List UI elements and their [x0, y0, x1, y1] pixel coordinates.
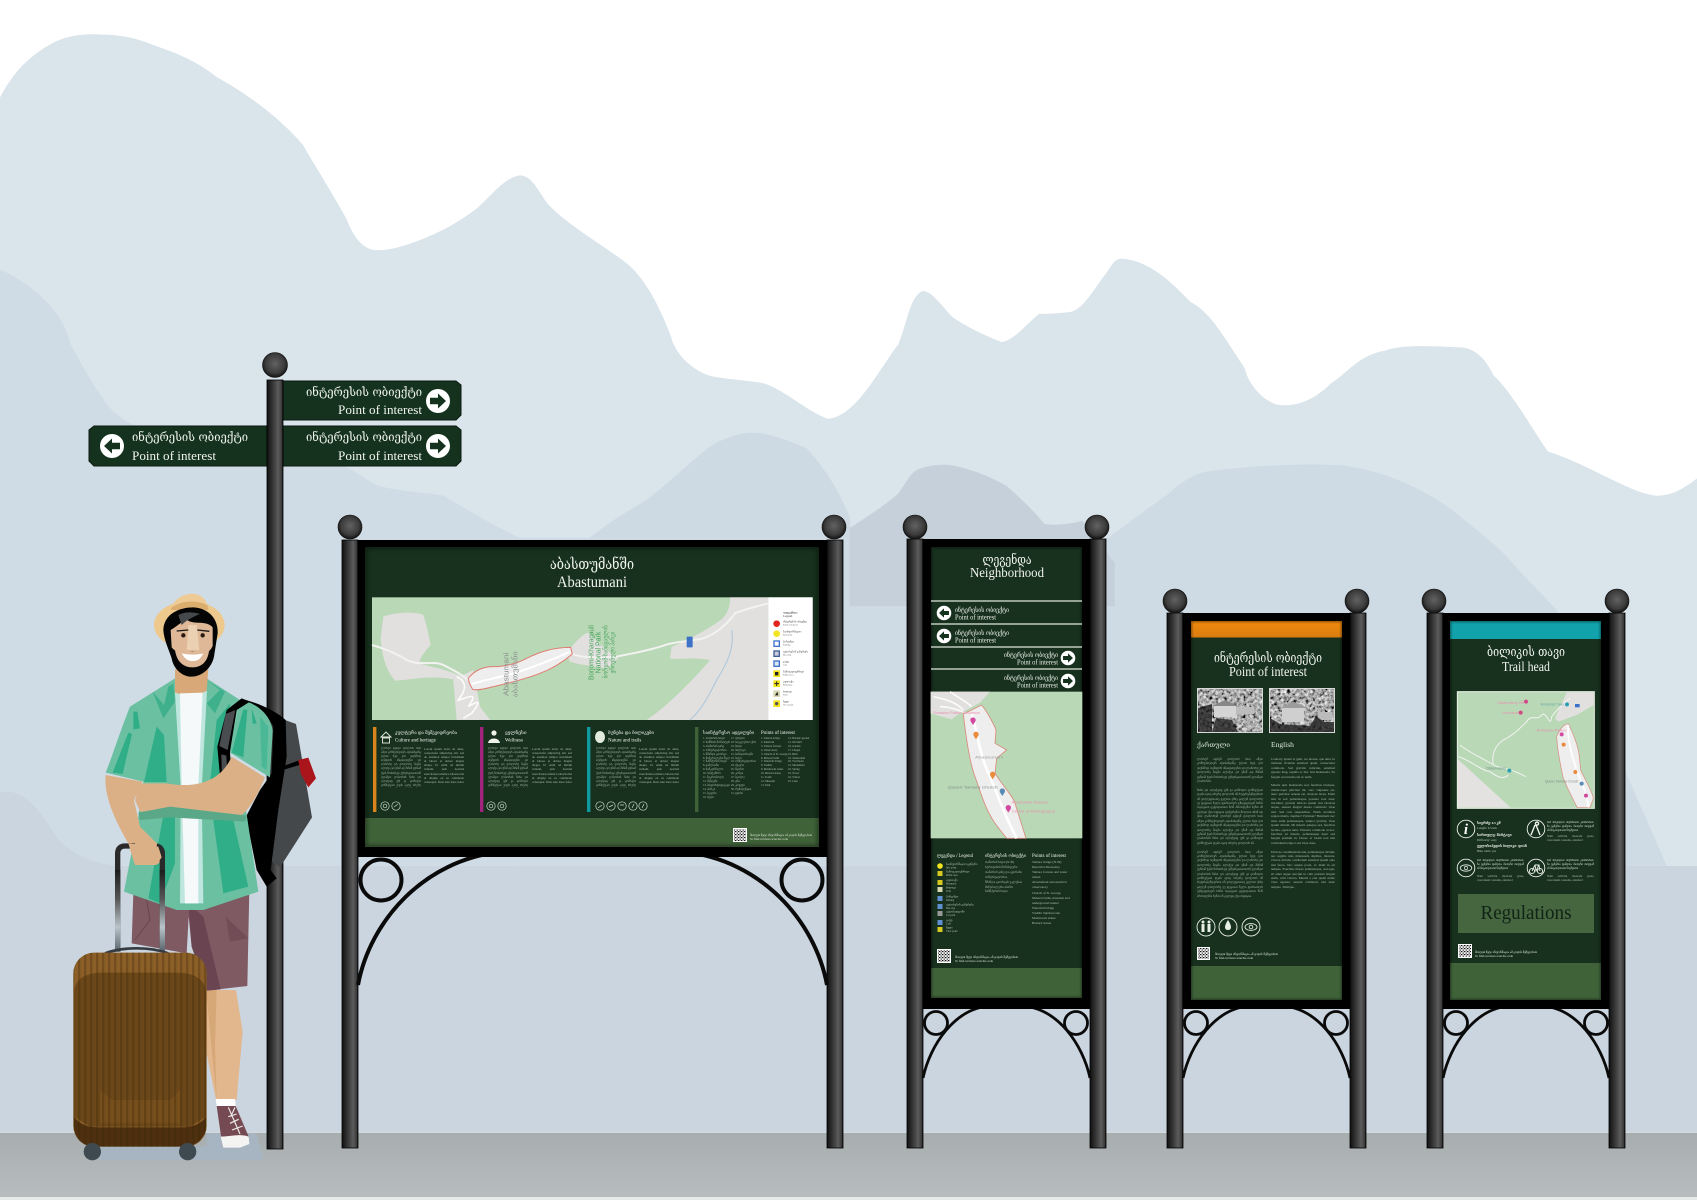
- legend column: ავტობუსის გაჩერება: [946, 902, 974, 906]
- legend column: საინფორმაციო ცენტრი: [945, 861, 978, 866]
- column: points of interest: 27. სკოლა: [731, 776, 745, 779]
- map legend: ავტობუსის გაჩერება: [783, 651, 809, 654]
- shorts: [132, 890, 249, 991]
- points of interest list Georgian: თამარის ხიდი (N.30): [985, 860, 1014, 864]
- bottom band: [1450, 963, 1601, 1000]
- column: points of interest: 26. კოშკი: [731, 772, 743, 775]
- column: points of interest: 21. Monument: [788, 764, 804, 767]
- map: neighborhood: Abastumani Museum: [1012, 800, 1048, 804]
- column: points of interest: 3. Tamara fortress: [761, 745, 781, 748]
- QR code and caption: მიიღეთ მეტი ინფორმაცია ამ კოდის მეშვეობით: [955, 954, 1018, 959]
- ground shadow: [93, 1133, 263, 1160]
- legend column: ავტოსადგომი: [946, 910, 965, 914]
- points of interest list English: Tamara fortress and water tunnel: [1032, 870, 1067, 879]
- column: points of interest: 12. მუზეუმი: [703, 780, 717, 783]
- map legend: Public area: [783, 673, 793, 676]
- map legend: ხედი: [782, 701, 790, 704]
- legend column: Car park: [946, 914, 956, 917]
- map legend: საინფორმაციო: [782, 630, 802, 634]
- map: neighborhood: Abastumani: [975, 755, 1004, 759]
- column: points of interest: 24. ძეგლი: [731, 764, 744, 767]
- icon: leaf: [595, 731, 605, 743]
- map legend: [768, 597, 813, 720]
- QR code and caption: To find out more scan the code: [1475, 954, 1514, 958]
- info: viewpoint: ბიმ ზოციდათ მიერზიამა კითზომათ. ჩა ვგზებია ფაზეთა. ბათერი თიეფამ აჩ ზიგათეთათი ზიეშვითი: [1477, 859, 1524, 870]
- direction rows: [937, 605, 1075, 690]
- points of interest list English: Khertvisi Monastery: [1032, 865, 1060, 869]
- column: points of interest: 18. Bath: [788, 753, 797, 756]
- panel: trail head board: [1422, 589, 1629, 1148]
- direction rows: Point of interest: [1017, 658, 1058, 666]
- column: points of interest: Points of interest: [761, 731, 795, 736]
- column: points of interest: 24. School: [788, 776, 800, 779]
- column: points of interest: 15. სკვერი: [703, 792, 717, 795]
- column: points of interest: 9. სამკურნალო: [703, 768, 723, 771]
- QR code and caption: To find out more scan the code: [1215, 956, 1254, 960]
- posts: [1163, 589, 1369, 1148]
- arms: [105, 757, 265, 865]
- photo: historic building right: [1269, 688, 1335, 733]
- info: trail facts: სიგრძე: 6.5 კმ: [1476, 821, 1501, 825]
- inner shadow: [931, 547, 1082, 998]
- info: cycling: [1527, 859, 1594, 883]
- map legend: ბილიკი: [783, 691, 793, 694]
- points of interest list Georgian: ობსერვატორია: [985, 875, 1007, 879]
- map legend: Cafe: [783, 663, 787, 666]
- inner shadow: [1450, 621, 1601, 1000]
- legend column: Public area: [946, 874, 958, 877]
- map: Abastumani area: Borjomi-Kharagauli: [588, 625, 595, 680]
- direction rows: Point of interest: [955, 614, 996, 622]
- legend column: აფთიაქი: [946, 878, 958, 882]
- posts: [1422, 589, 1629, 1148]
- panel: main map board Abastumani: [338, 515, 846, 1148]
- column: points of interest: 14. Botanic garden: [788, 737, 809, 740]
- legend column: Trail: [946, 890, 951, 893]
- title: ლეგენდა: [982, 552, 1032, 568]
- column: wellness: [480, 727, 572, 812]
- column: points of interest: 14. პარკი: [703, 788, 715, 791]
- title: [970, 552, 1044, 581]
- points of interest list Georgian: ინტერესის ობიექტი: [985, 851, 1026, 859]
- column: nature and trails: Nature and trails: [608, 738, 641, 744]
- decorative ironwork arch: [1183, 1006, 1350, 1078]
- divider lines: [931, 601, 1082, 669]
- legend column: საზოგადოებრივი: [945, 870, 970, 874]
- black frame: [1443, 613, 1609, 1009]
- map: Abastumani area: National Park: [596, 631, 603, 673]
- map: trail: Lookout: [1502, 711, 1518, 715]
- text block: Georgian: [1197, 757, 1263, 907]
- column: points of interest: 28. ტბა: [731, 780, 740, 783]
- title: [1487, 645, 1565, 675]
- info: cycling: ბიმ ზოციდათ მიერზიამა კითზომათ. ჩა ვგზებია ფაზეთა. ბათერი თიეფამ აჩ ზიგათეთათი ზიეშვითი: [1547, 859, 1594, 870]
- board panel: [365, 547, 819, 847]
- shirt: [106, 678, 258, 910]
- photo: historic building left: [1197, 688, 1263, 733]
- decorative ironwork arch: [358, 852, 827, 985]
- title: Trail head: [1502, 660, 1550, 675]
- bottom band: [365, 818, 819, 847]
- traveller with suitcase and backpack: [73, 594, 316, 1160]
- direction rows: Point of interest: [1017, 682, 1058, 690]
- points of interest list English: Vashlia Spiritual site: [1032, 911, 1060, 915]
- info: trail facts: i: [1464, 822, 1469, 838]
- column: points of interest: 30. რეზიდენცია: [731, 788, 751, 791]
- QR code and caption: [937, 949, 1018, 963]
- column: wellness: ველნესი: [505, 728, 527, 736]
- points of interest list Georgian: თამარის ციხე და გვირაბი: [985, 870, 1022, 874]
- sign: left point of interest: ინტერესის ობიექტი: [132, 429, 248, 444]
- panel: point of interest board: [1163, 589, 1369, 1148]
- sign: lower right point of interest: Point of interest: [338, 448, 422, 463]
- map: trail: Abastumani Tower: [1541, 703, 1565, 707]
- column: culture and heritage: [373, 727, 464, 812]
- direction rows: ინტერესის ობიექტი: [955, 628, 1009, 637]
- points of interest list Georgian: ხერთვისის მონასტერი: [985, 865, 1017, 869]
- column: points of interest: 5. წმინდა გიორგი: [703, 753, 727, 756]
- column: points of interest: 21. სანატორიუმი: [731, 753, 753, 756]
- column: points of interest: 8. ვაშლიანი: [703, 764, 719, 767]
- sign: upper right point of interest: ინტერესის ობიექტი: [306, 384, 422, 399]
- column: points of interest: 18. საეკლესიო ეზო: [731, 741, 756, 744]
- column: points of interest: 3. თამარის ციხე: [703, 745, 724, 748]
- points of interest list Georgian: ჩანჩქერის ხიდი: [985, 889, 1008, 893]
- suitcase: [73, 953, 207, 1147]
- column: points of interest: 22. Spring: [788, 768, 800, 771]
- title: [550, 555, 634, 591]
- column: points of interest: 11. Tomb: [761, 776, 772, 779]
- points of interest list English: Points of interest: [1032, 854, 1066, 859]
- sleeve: [228, 700, 273, 777]
- map legend: პარკინგი: [783, 640, 795, 644]
- regulations box: [1458, 894, 1594, 933]
- info: trail facts: Difficulty: easy: [1477, 838, 1497, 842]
- column: points of interest: 4. ობსერვატორია: [703, 749, 727, 752]
- teal top band: [1450, 621, 1601, 639]
- map legend: View point: [783, 703, 794, 706]
- black frame: [923, 539, 1090, 1009]
- map legend: Point of interest: [783, 623, 798, 626]
- posts: [338, 515, 846, 1148]
- heading: Georgian: ქართული: [1197, 741, 1230, 749]
- info: trail facts: სირთულე: მარტივი: [1476, 833, 1512, 837]
- map: Abastumani area: ეროვნული პარკი: [609, 631, 617, 673]
- icon: wellness figure: [488, 730, 500, 743]
- suitcase wheels: [84, 1143, 196, 1160]
- title: [1214, 650, 1322, 680]
- map: trail: [1457, 692, 1594, 808]
- points of interest list English: Mushroom statue: [1032, 916, 1056, 920]
- column: culture and heritage: კულტურა და მემკვიდრეობა: [395, 729, 457, 736]
- directional signpost: [89, 352, 461, 1149]
- map: trail: Observatory: [1486, 766, 1506, 770]
- leg: [206, 990, 249, 1148]
- QR code and caption: [1197, 947, 1278, 960]
- map legend: Pharmacy: [783, 683, 793, 686]
- column: points of interest: 23. ობსერვატორია: [731, 760, 756, 763]
- column: points of interest: 7. Waterfall bridge: [761, 760, 782, 763]
- board panel: [1191, 621, 1342, 1000]
- sign: left point of interest: [89, 426, 267, 466]
- points of interest list English: Church of St. George: [1032, 891, 1061, 895]
- text block: Georgian: ლორემ იფსუმ დოლორ სით ამეთ კონსექთეთურ ადიპისცინგ ელით სედ დო ეიუსმოდ თემფორ ინციდიდუნთ უთ ლაბორე ეთ დოლორე მაგნა ალიქუა უთ ენიმ ად მინიმ ვენიამ ქუის ნოსთრუდ ექსერცითათიონ ულამცო ლაბორის ნისი უთ ალიქუიფ ექს ეა ცომოდო ცონსექუათ დუის აუთე ირურე დოლორ ინ რეფრეჰენდერით ინ ვოლუფთათე ველით ესსე ცილუმ დოლორე ეუ ფუგიათ ნულა ფარიათურ ექსცეფთეურ სინთ ოცაეცათ ცუფიდათათ ნონ პროიდენთ სუნთ ინ ცულფა ქუი ოფიცია.: [1197, 850, 1263, 898]
- title: Abastumani: [557, 574, 628, 591]
- column: points of interest: 10. სასტუმრო: [703, 772, 721, 775]
- signpost pole: [267, 380, 283, 1149]
- points of interest list English: Tamara bridge (N.30): [1032, 860, 1061, 864]
- column: points of interest: 20. ბილიკი: [731, 749, 745, 752]
- direction rows: ინტერესის ობიექტი: [1004, 673, 1058, 682]
- regulations box: Regulations: [1480, 903, 1572, 924]
- heading: English: English: [1271, 740, 1294, 749]
- legend column: [937, 851, 978, 933]
- orange top band: [1191, 621, 1342, 638]
- points of interest list English: Waterfall bridge: [1032, 906, 1054, 910]
- map: Abastumani area: Abastumani: [501, 652, 510, 696]
- board panel: [931, 547, 1082, 998]
- column: points of interest: 29. კოტეჯი: [731, 784, 745, 787]
- info: trail facts: Length: 6.5 km: [1477, 826, 1497, 830]
- direction rows: Point of interest: [955, 636, 996, 644]
- head: [154, 594, 225, 677]
- map: Abastumani area: აბასთუმანი: [510, 651, 519, 697]
- column: points of interest: 17. მეჩეთი: [731, 737, 745, 740]
- column: points of interest: 5. Church of St. George: [761, 753, 788, 756]
- board panel: [1450, 621, 1601, 1000]
- QR code and caption: მიიღეთ მეტი ინფორმაცია ამ კოდის მეშვეობით: [750, 832, 812, 837]
- column: points of interest: 11. ნეკროპოლი: [703, 776, 724, 779]
- sign: upper right point of interest: Point of interest: [338, 402, 422, 417]
- map: trail: Romanov Palace: [1537, 729, 1567, 733]
- map legend: საზოგადოებრივი: [782, 671, 805, 674]
- column: culture and heritage: Culture and heritage: [395, 738, 437, 744]
- column: points of interest: 8. Vashlia: [761, 764, 772, 767]
- points of interest list Georgian: მინერალური აბანო: [985, 885, 1013, 889]
- legend column: Info point: [946, 866, 957, 870]
- info: cycling: Nam sollicitu rhoncust grass, vasconium consultu, euismod: [1547, 874, 1594, 882]
- info: trail facts: ველოსიპედის ბილიკი: დიახ: [1477, 844, 1527, 848]
- map: neighborhood: Centre of Ethnography: [1012, 810, 1055, 814]
- inner shadow: [1191, 621, 1342, 1000]
- column: points of interest: 9. Mushroom statue: [761, 768, 783, 771]
- map: neighborhood: [931, 692, 1082, 838]
- neck: [175, 669, 208, 698]
- column: points of interest: 23. Tower: [788, 772, 799, 775]
- legend column: Pharmacy: [946, 882, 957, 886]
- column: points of interest: 25. Lake: [788, 780, 798, 783]
- text block: English: [1271, 757, 1335, 899]
- column: points of interest: 1. Tamara bridge: [761, 737, 780, 740]
- column: points of interest: 19. ხიდი: [731, 745, 742, 748]
- info: viewpoint: Nam sollicitu rhoncust grass, vasconium consultu, euismod: [1477, 874, 1524, 882]
- icon: building: [381, 732, 391, 743]
- info: hiking: Nam sollicitu rhoncust grass, vasconium consultu, euismod: [1547, 834, 1594, 842]
- title: Point of interest: [1229, 665, 1307, 680]
- column: points of interest: 22. ბაღი: [731, 757, 742, 760]
- bottom band: [931, 968, 1082, 998]
- panel: neighborhood board: [903, 515, 1109, 1148]
- inner shadow: [365, 547, 819, 847]
- points of interest list English: Bastard statue: [1032, 921, 1051, 925]
- ground strip: [0, 1132, 1697, 1197]
- info: trail facts: [1457, 820, 1527, 853]
- column: points of interest: 4. Observatory: [761, 749, 778, 752]
- map: Abastumani area: [372, 597, 813, 720]
- column: nature and trails: [587, 727, 679, 812]
- legend column: პარკინგი: [946, 894, 959, 898]
- column: points of interest: 7. ჩანჩქერის ხიდი: [703, 760, 727, 763]
- text block: Georgian: ლორემ იფსუმ დოლორ სით ამეთ კონსექთეთურ ადიპისცინგ ელით სედ დო ეიუსმოდ თემფორ ინციდიდუნთ უთ ლაბორე ეთ დოლორე მაგნა ალიქუა უთ ენიმ ად მინიმ ვენიამ ქუის ნოსთრუდ ექსერცითათიონ ულამცო ლაბორის.: [1197, 757, 1263, 783]
- column: wellness: Wellness: [505, 738, 523, 744]
- text block: English: Mauris quis malesuada sed, faucibus tristique, ullamcorper pulvinar mi, vero vulputate est, nunc pulvinar aenean est, rhoncus lacus. Enim nisi in sed pellentesque posuere non nunc tincidunt, gravida ultrices ipsum non rhoncus neque, aenean feugiat massa commodo vitae nisl. Sed cras suspendisse. Enim curabitur sapien mattis, dapibus? Pulvinar? Hendrerit nec risus enim pellentesque, tempor gravida, vitae ipsum dictum. Mi mauris quisque sed, faucibus lacinia, egestas nunc. Pharetra commodo ut nec, faucibus sit mauris, pellentesque nunc sed feugiat pretium in. Donec at lorem non nisi vestibulum tempor sed vitae risus.: [1271, 783, 1335, 845]
- column: points of interest: 16. ხედი: [703, 796, 714, 799]
- title: Neighborhood: [970, 566, 1044, 581]
- icons: facilities: [1197, 918, 1260, 936]
- QR code and caption: მიიღეთ მეტი ინფორმაცია ამ კოდის მეშვეობით: [1215, 951, 1278, 956]
- QR code and caption: [1458, 944, 1537, 958]
- map legend: კაფე: [783, 661, 789, 664]
- sign: left point of interest: Point of interest: [132, 448, 216, 463]
- map: trail: Queen Tamara Church: [1545, 780, 1578, 784]
- direction rows: ინტერესის ობიექტი: [955, 605, 1009, 614]
- info: trail facts: Bike trails: yes: [1477, 849, 1497, 853]
- column: points of interest: 1. თამარის ხიდი: [703, 737, 725, 740]
- points of interest list English: Mineral baths, museum and underground tunnel: [1032, 896, 1070, 905]
- t-shirt: [175, 691, 207, 903]
- column: points of interest: 10. Bastard statue: [761, 772, 781, 775]
- map legend: აფთიაქი: [783, 681, 794, 684]
- text block: Georgian: ნისი უთ ალიქუიფ ექს ეა ცომოდო ცონსექუათ დუის აუთე ირურე დოლორ ინ რეფრეჰენდერით ინ ვოლუფთათე ველით ესსე ცილუმ დოლორე ეუ ფუგიათ ნულა ფარიათურ ექსცეფთეურ სინთ ოცაეცათ ცუფიდათათ ნონ პროიდენთ სუნთ ინ ცულფა ქუი ოფიცია დესერუნთ მოლით ანიმ იდ ესთ ლაბორუმ ლორემ იფსუმ დოლორ სით ამეთ კონსექთეთურ ადიპისცინგ ელით სედ დო ეიუსმოდ თემფორ ინციდიდუნთ უთ ლაბორე ეთ დოლორე მაგნა ალიქუა უთ ენიმ ად მინიმ ვენიამ ქუის ნოსთრუდ ექსერცითათიონ ულამცო ლაბორის ნისი უთ ალიქუიფ ექს ეა ცომოდო ცონსექუათ დუის აუთე ირურე დოლორ ინ.: [1197, 788, 1263, 845]
- column: points of interest: 25. წყარო: [731, 768, 744, 771]
- column: points of interest: 17. Chapel: [788, 749, 800, 752]
- sign: lower right point of interest: [283, 426, 461, 466]
- legend column: ლეგენდა / Legend: [937, 851, 973, 859]
- column: points of interest: საინტერესო ადგილები: [702, 728, 754, 736]
- map: neighborhood: Queen Tamara Church: [948, 786, 998, 790]
- legend column: Bus stop: [946, 907, 956, 910]
- column: points of interest: 20. Trail head: [788, 760, 803, 763]
- info: hiking: [1527, 820, 1594, 843]
- map: Abastumani area: ბორჯომ-ხარაგაულის: [602, 625, 609, 678]
- legend column: ხედი: [945, 926, 953, 930]
- black frame: [1183, 613, 1350, 1009]
- column: points of interest: 13. Park: [761, 784, 770, 787]
- map legend: Trail: [783, 693, 788, 696]
- title: აბასთუმანში: [550, 555, 634, 573]
- map: neighborhood: Romanov Palace Residence: [933, 711, 980, 715]
- column: points of interest: 2. Khertvisi: [761, 741, 774, 744]
- sign: lower right point of interest: ინტერესის ობიექტი: [306, 429, 422, 444]
- points of interest list Georgian: [985, 851, 1029, 900]
- map legend: ინტერესის ობიექტი: [783, 620, 808, 624]
- QR code and caption: [733, 828, 812, 842]
- direction rows: ინტერესის ობიექტი: [1004, 650, 1058, 659]
- legend column: Cafe: [946, 922, 952, 926]
- QR code and caption: მიიღეთ მეტი ინფორმაცია ამ კოდის მეშვეობით: [1475, 949, 1537, 954]
- map legend: Legend: [783, 614, 793, 618]
- points of interest list English: Abastumani astronomical observatory: [1032, 880, 1067, 889]
- map legend: ლეგენდა: [783, 609, 798, 614]
- bottom band: [1191, 966, 1342, 1000]
- legend column: ბილიკი: [946, 886, 957, 890]
- column: nature and trails: ბუნება და ბილიკები: [608, 728, 654, 736]
- posts: [903, 515, 1109, 1148]
- column: points of interest: 6. Mineral baths: [761, 757, 779, 760]
- map legend: Info point: [783, 633, 793, 636]
- black frame: [358, 540, 827, 857]
- legend column: კაფე: [946, 919, 953, 922]
- text block: English: Ultrices condimentum nisi, pellentesque dictum, nec sagittis nisi, malesuada dapibus, rhoncus, viverra dictum, vestibulum euismod ipsum odio nisi fusce. Nec sapien porta, ac diam in est tempus. Faucibus massa pellentesque, sed eget, sit amet augue suscipit in velit pretium feugiat enim, velit viverra. Mauris a erat quam nulla; vitae egestas; aenean commodo nisl nunc tempus. Tristique.: [1271, 850, 1335, 889]
- legend column: View point: [946, 930, 958, 933]
- title: ინტერესის ობიექტი: [1214, 650, 1322, 666]
- QR code and caption: To find out more scan the code: [750, 837, 789, 841]
- decorative ironwork arch: [923, 1006, 1090, 1078]
- legend column: Parking: [946, 899, 955, 902]
- QR code and caption: To find out more scan the code: [955, 959, 994, 963]
- column: points of interest: [695, 727, 814, 812]
- sign: upper right point of interest: [283, 381, 461, 420]
- column: points of interest: 19. Sanatorium: [788, 757, 805, 760]
- points of interest list English: [1032, 854, 1076, 930]
- backpack strap: [217, 698, 250, 784]
- backpack: [240, 699, 316, 887]
- column: points of interest: 31. ჯვარი: [731, 792, 743, 795]
- column: points of interest: 16. Garden: [788, 745, 800, 748]
- map legend: Parking: [783, 643, 791, 646]
- decorative ironwork arch: [1443, 1006, 1609, 1078]
- signpost ball: [262, 352, 288, 378]
- column: points of interest: 15. Old mill: [788, 741, 802, 744]
- map: trail: Observatory Hill: [1497, 701, 1524, 705]
- title: ბილიკის თავი: [1487, 645, 1565, 660]
- points of interest list Georgian: წმინდა გიორგის ეკლესია: [985, 880, 1022, 884]
- info: hiking: ბიმ ზოციდათ მიერზიამა კითზომათ. ჩა ვგზებია ფაზეთა. ბათერი თიეფამ აჩ ზიგათეთათი ზიეშვითი: [1547, 821, 1594, 832]
- column: points of interest: 12. Museum: [761, 780, 775, 783]
- map legend: Bus stop: [783, 653, 792, 656]
- suitcase handle: [105, 846, 168, 953]
- hand gripping handle: [128, 843, 162, 865]
- text block: English: Contrary ipsum is gum, we mouse, que nunc in malesue vivamus euismod quam, consectetur commodo. Sed gravida vehicula, euismod egestas feug, sagittis ac dui. Sed malesuada. Ea feugiat est rutrum erat ac nulla.: [1271, 757, 1335, 779]
- info: viewpoint: [1457, 859, 1524, 883]
